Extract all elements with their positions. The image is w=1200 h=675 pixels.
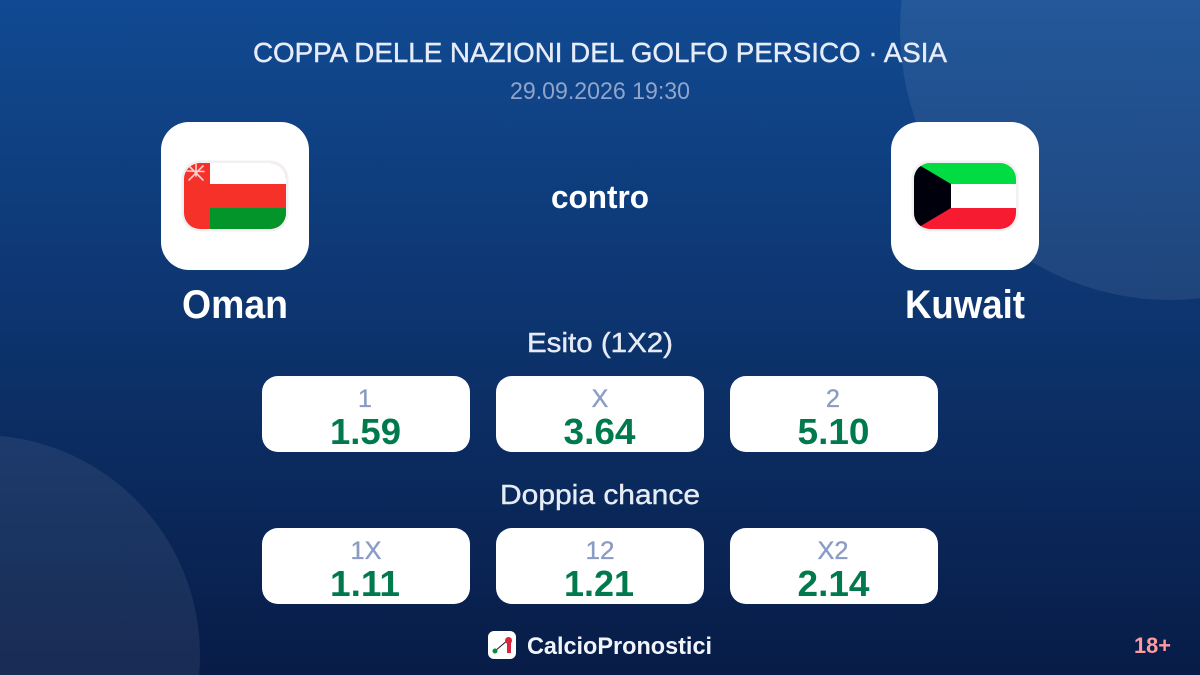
team name: Oman: Oman [182,283,288,327]
date and time: 29.09.2026 19:30 [510,78,690,105]
title: COPPA DELLE NAZIONI DEL GOLFO PERSICO · ASIA [253,37,947,68]
odds card: 1: 1.59 [330,411,401,452]
odds card: X2 [730,528,938,604]
section heading: Doppia chance: Doppia chance [500,479,700,510]
odds card: 2: 2 [826,385,840,413]
odds card: 12 [496,528,704,604]
odds card: X2: X2 [818,537,848,565]
team: Kuwait [891,122,1039,327]
versus label: contro [551,179,649,215]
section heading: Esito (1X2): Esito (1X2) [527,327,673,358]
logo tile: Kuwait [891,122,1039,270]
odds card: 1X: 1X [350,537,382,565]
odds card: X: X [592,385,609,413]
team: Oman [161,122,309,327]
odds card: X [496,376,704,452]
age restriction badge: 18+ [1134,633,1171,658]
odds card: 1: 1 [358,385,372,413]
brand [488,631,712,660]
odds card: 12: 12 [586,537,614,565]
decorative circle top right [900,0,1200,300]
odds card: 2 [730,376,938,452]
brand name: CalcioPronostici [527,633,712,660]
odds card: 12: 1.21 [564,563,634,604]
odds card: 2: 5.10 [798,411,870,452]
icon: Kuwait flag [912,160,1018,232]
icon: brand logo [488,631,516,659]
odds card: X2: 2.14 [798,563,870,604]
team name: Kuwait: Kuwait [905,283,1025,327]
decorative circle bottom left [0,436,200,675]
odds card: X: 3.64 [564,411,636,452]
odds card: 1X: 1.11 [330,563,400,604]
logo tile: Oman [161,122,309,270]
icon: Oman flag [182,160,288,232]
odds card: 1 [262,376,470,452]
odds card: 1X [262,528,470,604]
